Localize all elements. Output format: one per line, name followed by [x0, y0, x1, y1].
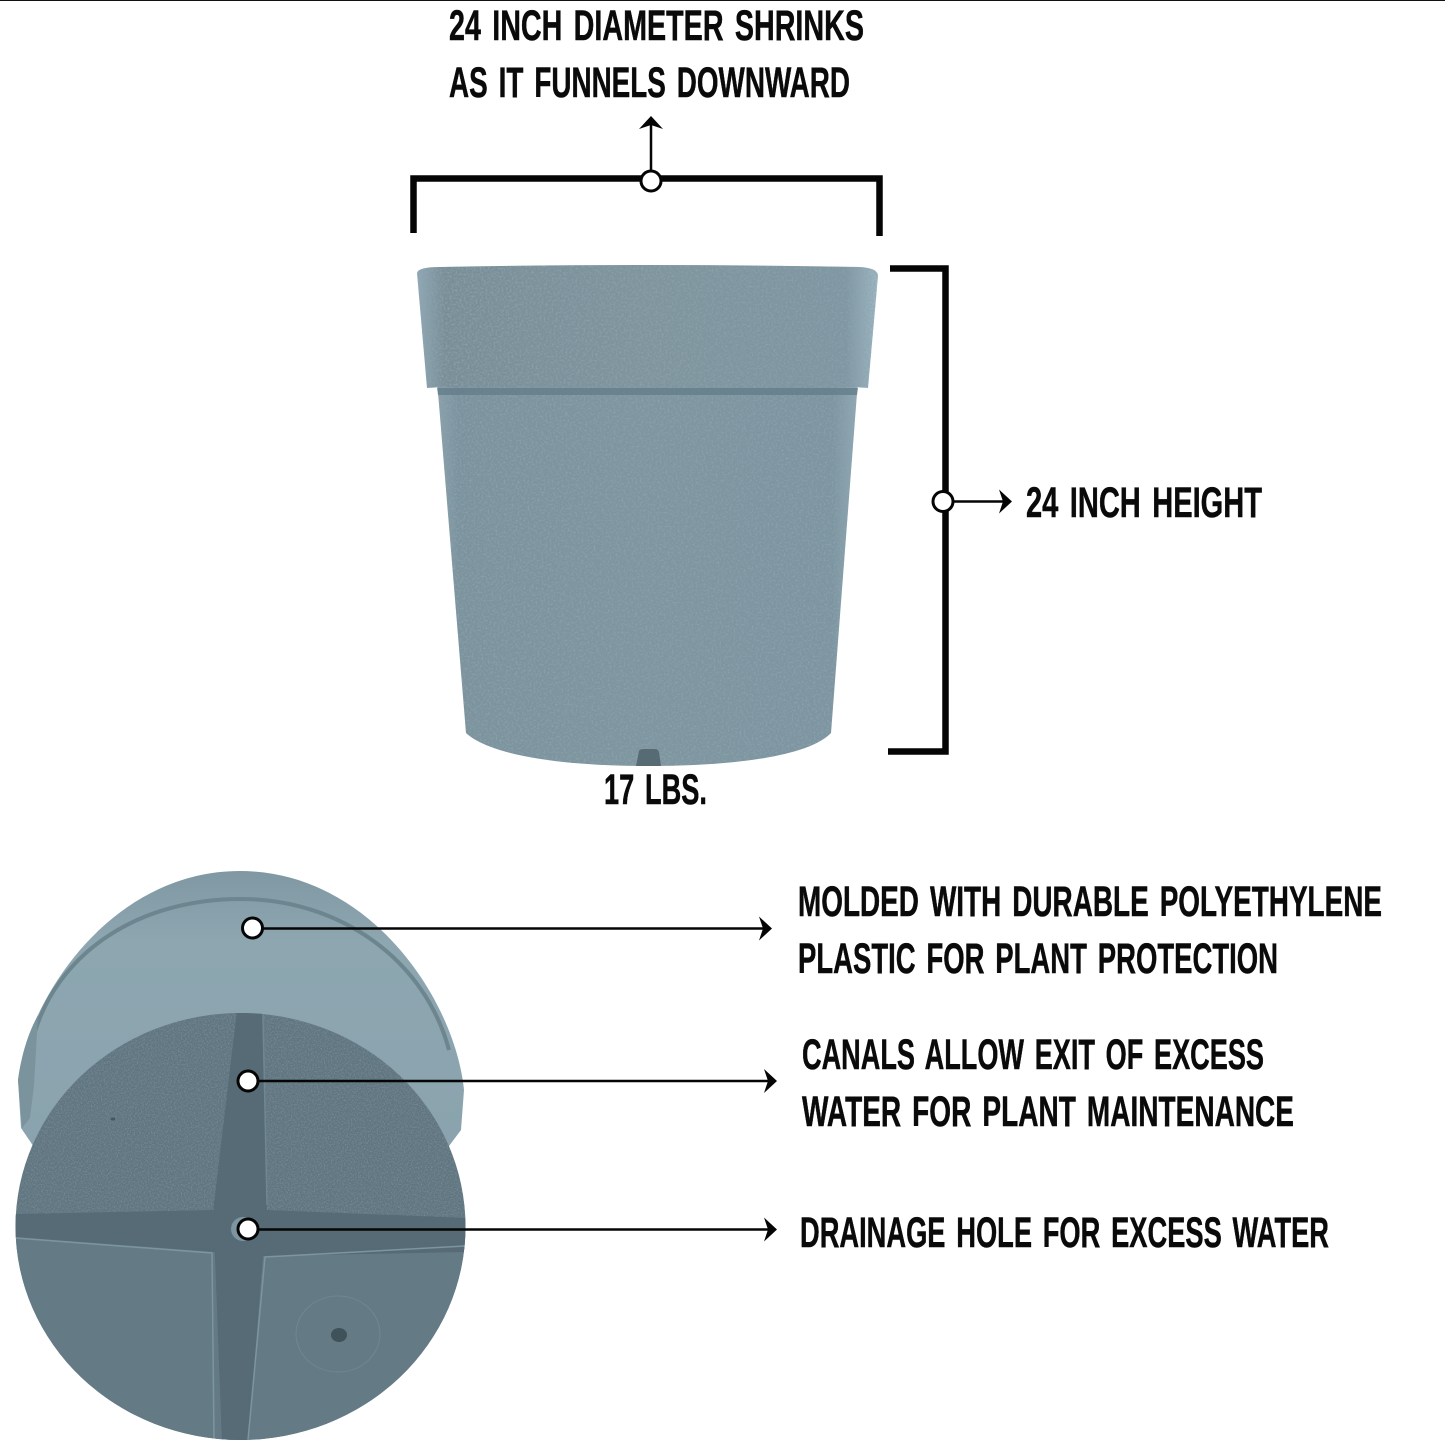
center drain glint — [231, 1217, 255, 1241]
height bracket with arrow — [888, 268, 1012, 752]
diameter label — [449, 2, 864, 107]
diameter label: 24 INCH DIAMETER SHRINKS — [449, 2, 864, 50]
wall side shading — [18, 1015, 38, 1128]
canals — [14, 1010, 468, 1445]
small mark — [110, 1118, 116, 1120]
drainage notch — [636, 749, 661, 766]
top edge line — [0, 0, 1445, 1]
canals callout pointer — [238, 1069, 777, 1093]
pot: side view — [417, 265, 878, 766]
canals callout text — [802, 1031, 1294, 1136]
drain plug hole — [331, 1328, 347, 1342]
pot rim — [417, 265, 878, 388]
diameter bracket with arrow — [414, 116, 880, 236]
diameter label: AS IT FUNNELS DOWNWARD — [449, 59, 850, 107]
polyethylene callout text — [798, 878, 1382, 983]
pot base disc — [16, 1013, 466, 1440]
rim shadow — [437, 388, 858, 395]
height label: 24 INCH HEIGHT — [1026, 479, 1262, 527]
drain plug ring — [296, 1296, 380, 1372]
pot outer wall — [18, 871, 464, 1150]
pot body — [437, 380, 858, 766]
polyethylene callout pointer — [242, 916, 772, 940]
drainage callout pointer — [238, 1218, 777, 1242]
rim ridge — [34, 899, 449, 1050]
weight label: 17 LBS. — [604, 766, 707, 814]
pot: underside view — [14, 871, 468, 1445]
lower base quadrants — [16, 1236, 465, 1445]
